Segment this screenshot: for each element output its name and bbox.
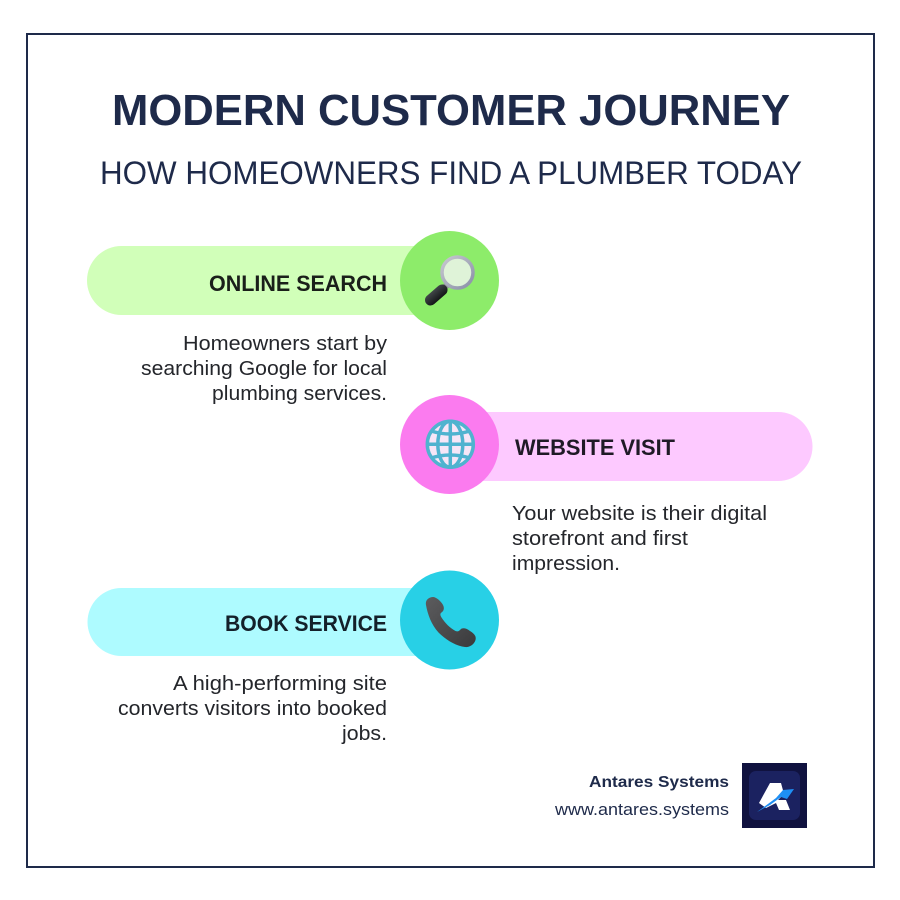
company name: Antares Systems bbox=[589, 774, 729, 791]
step 1 description: searching Google for local bbox=[141, 358, 387, 380]
icon: globe bbox=[427, 421, 474, 468]
step 2 description: storefront and first bbox=[512, 528, 688, 550]
step 3 description: converts visitors into booked bbox=[118, 698, 387, 720]
title: MODERN CUSTOMER JOURNEY bbox=[112, 86, 790, 135]
step 3 heading: BOOK SERVICE bbox=[225, 611, 387, 636]
step 3 description: jobs. bbox=[341, 723, 387, 745]
icon: telephone handset bbox=[426, 597, 476, 647]
footer brand bbox=[554, 763, 807, 828]
subtitle: HOW HOMEOWNERS FIND A PLUMBER TODAY bbox=[100, 155, 802, 191]
step 1 description: Homeowners start by bbox=[183, 333, 387, 355]
step 1 circle bbox=[400, 231, 499, 330]
step 3 circle bbox=[400, 570, 499, 670]
step 3 description: A high-performing site bbox=[173, 673, 387, 695]
step 2 circle bbox=[400, 395, 499, 494]
logo bbox=[742, 763, 807, 828]
step 1: online search bbox=[87, 231, 499, 405]
icon: magnifying glass bbox=[430, 257, 473, 300]
step 2 description bbox=[512, 503, 767, 575]
step 3: book service bbox=[88, 570, 499, 745]
step 3 description bbox=[118, 673, 387, 745]
step 1 pill bbox=[87, 246, 430, 315]
step 2: website visit bbox=[400, 395, 813, 575]
step 3 pill bbox=[88, 588, 430, 656]
website url: www.antares.systems bbox=[554, 801, 729, 819]
step 2 description: impression. bbox=[512, 553, 620, 575]
step 1 description bbox=[141, 333, 387, 405]
step 2 heading: WEBSITE VISIT bbox=[515, 435, 676, 460]
step 1 heading: ONLINE SEARCH bbox=[209, 271, 387, 296]
step 2 description: Your website is their digital bbox=[512, 503, 767, 525]
step 2 pill bbox=[470, 412, 813, 481]
step 1 description: plumbing services. bbox=[212, 383, 387, 405]
